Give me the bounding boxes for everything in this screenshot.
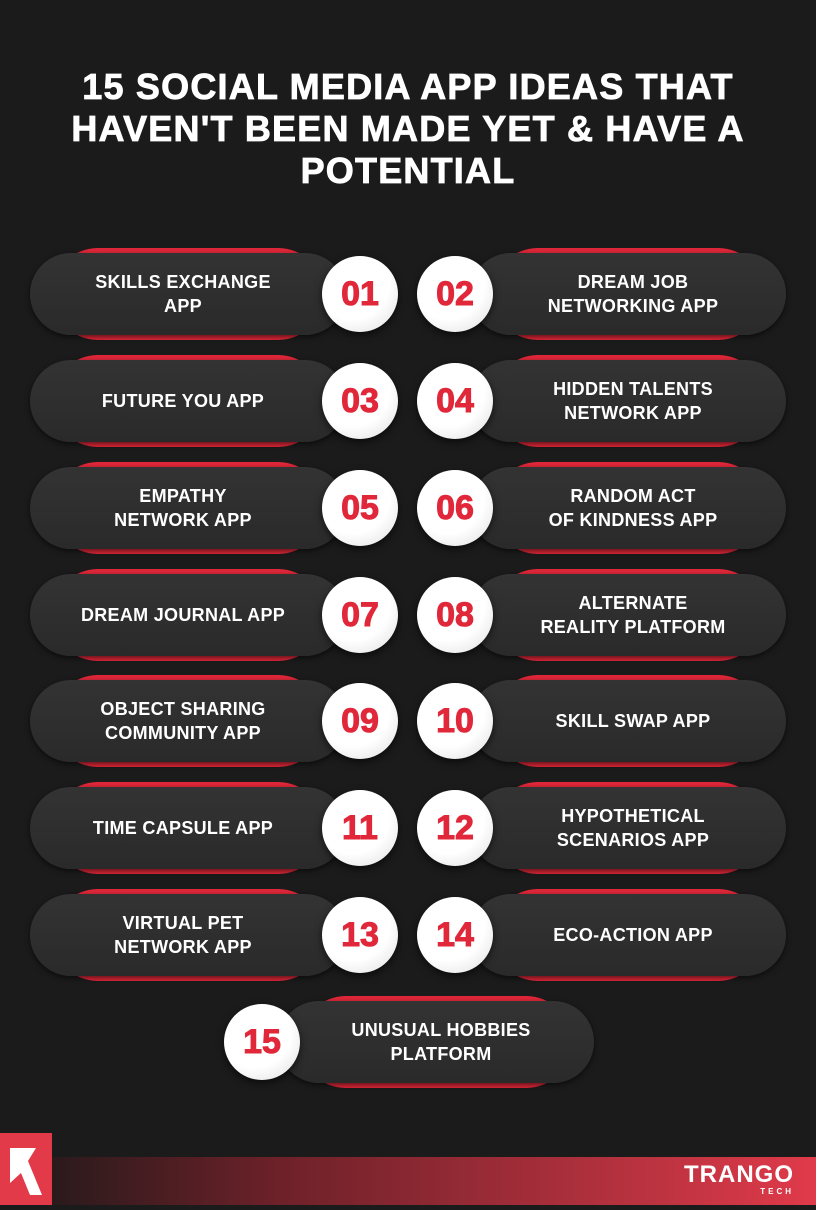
item 07 <box>30 569 334 661</box>
number 04 <box>417 363 493 439</box>
number 05 <box>322 470 398 546</box>
number 03: 03 <box>341 382 379 420</box>
number 12: 12 <box>436 808 474 846</box>
item 10: SKILL SWAP APP <box>556 711 710 731</box>
number 09 <box>322 683 398 759</box>
number 12 <box>417 790 493 866</box>
title: 15 SOCIAL MEDIA APP IDEAS THAT <box>82 66 734 107</box>
item 11: TIME CAPSULE APP <box>93 818 273 838</box>
number 03 <box>322 363 398 439</box>
number 01: 01 <box>341 274 379 312</box>
item 08: REALITY PLATFORM <box>540 617 726 637</box>
number 05: 05 <box>341 488 379 526</box>
item 06 <box>481 462 786 554</box>
item 11 <box>30 782 334 874</box>
item 12: SCENARIOS APP <box>557 830 709 850</box>
item 04: HIDDEN TALENTS <box>553 379 713 399</box>
item 01: APP <box>164 296 202 316</box>
number 14: 14 <box>436 916 474 954</box>
item 13: VIRTUAL PET <box>122 913 243 933</box>
item 13 <box>30 889 334 981</box>
item 14 <box>481 889 786 981</box>
number 08 <box>417 577 493 653</box>
number 01 <box>322 256 398 332</box>
item 08 <box>481 569 786 661</box>
number 09: 09 <box>341 702 379 740</box>
item 06: OF KINDNESS APP <box>549 510 717 530</box>
item 03 <box>30 355 334 447</box>
logo text: TRANGO <box>684 1161 794 1188</box>
number 13: 13 <box>341 916 379 954</box>
item 12 <box>481 782 786 874</box>
item 15: PLATFORM <box>390 1044 492 1064</box>
title: POTENTIAL <box>301 150 515 191</box>
number 11 <box>322 790 398 866</box>
item 14: ECO-ACTION APP <box>553 925 713 945</box>
number 07: 07 <box>341 596 379 634</box>
number 08: 08 <box>436 596 474 634</box>
number 02: 02 <box>436 274 474 312</box>
title: HAVEN'T BEEN MADE YET & HAVE A <box>71 108 745 149</box>
logo icon square <box>0 1133 52 1205</box>
item 04 <box>481 355 786 447</box>
item 09: OBJECT SHARING <box>100 699 266 719</box>
item 12: HYPOTHETICAL <box>561 806 705 826</box>
number 10 <box>417 683 493 759</box>
number 07 <box>322 577 398 653</box>
number 15: 15 <box>243 1022 281 1060</box>
number 06 <box>417 470 493 546</box>
item 13: NETWORK APP <box>114 937 252 957</box>
item 04: NETWORK APP <box>564 403 702 423</box>
number 13 <box>322 897 398 973</box>
number 10: 10 <box>436 702 474 740</box>
item 02: DREAM JOB <box>578 272 688 292</box>
title <box>71 66 745 191</box>
number 06: 06 <box>436 488 474 526</box>
number 14 <box>417 897 493 973</box>
item 05: EMPATHY <box>139 486 227 506</box>
item 03: FUTURE YOU APP <box>102 391 264 411</box>
number 02 <box>417 256 493 332</box>
item 15: UNUSUAL HOBBIES <box>351 1020 531 1040</box>
number 04: 04 <box>436 382 474 420</box>
logo text: TECH <box>760 1187 794 1196</box>
item 05: NETWORK APP <box>114 510 252 530</box>
item 08: ALTERNATE <box>578 593 688 613</box>
item 02: NETWORKING APP <box>548 296 718 316</box>
item 01 <box>30 248 334 340</box>
item 09 <box>30 675 334 767</box>
item 09: COMMUNITY APP <box>105 723 261 743</box>
item 07: DREAM JOURNAL APP <box>81 605 285 625</box>
item 06: RANDOM ACT <box>570 486 696 506</box>
number 11: 11 <box>342 808 378 846</box>
footer bar <box>52 1157 816 1205</box>
item 10 <box>481 675 786 767</box>
item 15 <box>288 996 594 1088</box>
item 02 <box>481 248 786 340</box>
item 05 <box>30 462 334 554</box>
number 15 <box>224 1004 300 1080</box>
item 01: SKILLS EXCHANGE <box>95 272 271 292</box>
